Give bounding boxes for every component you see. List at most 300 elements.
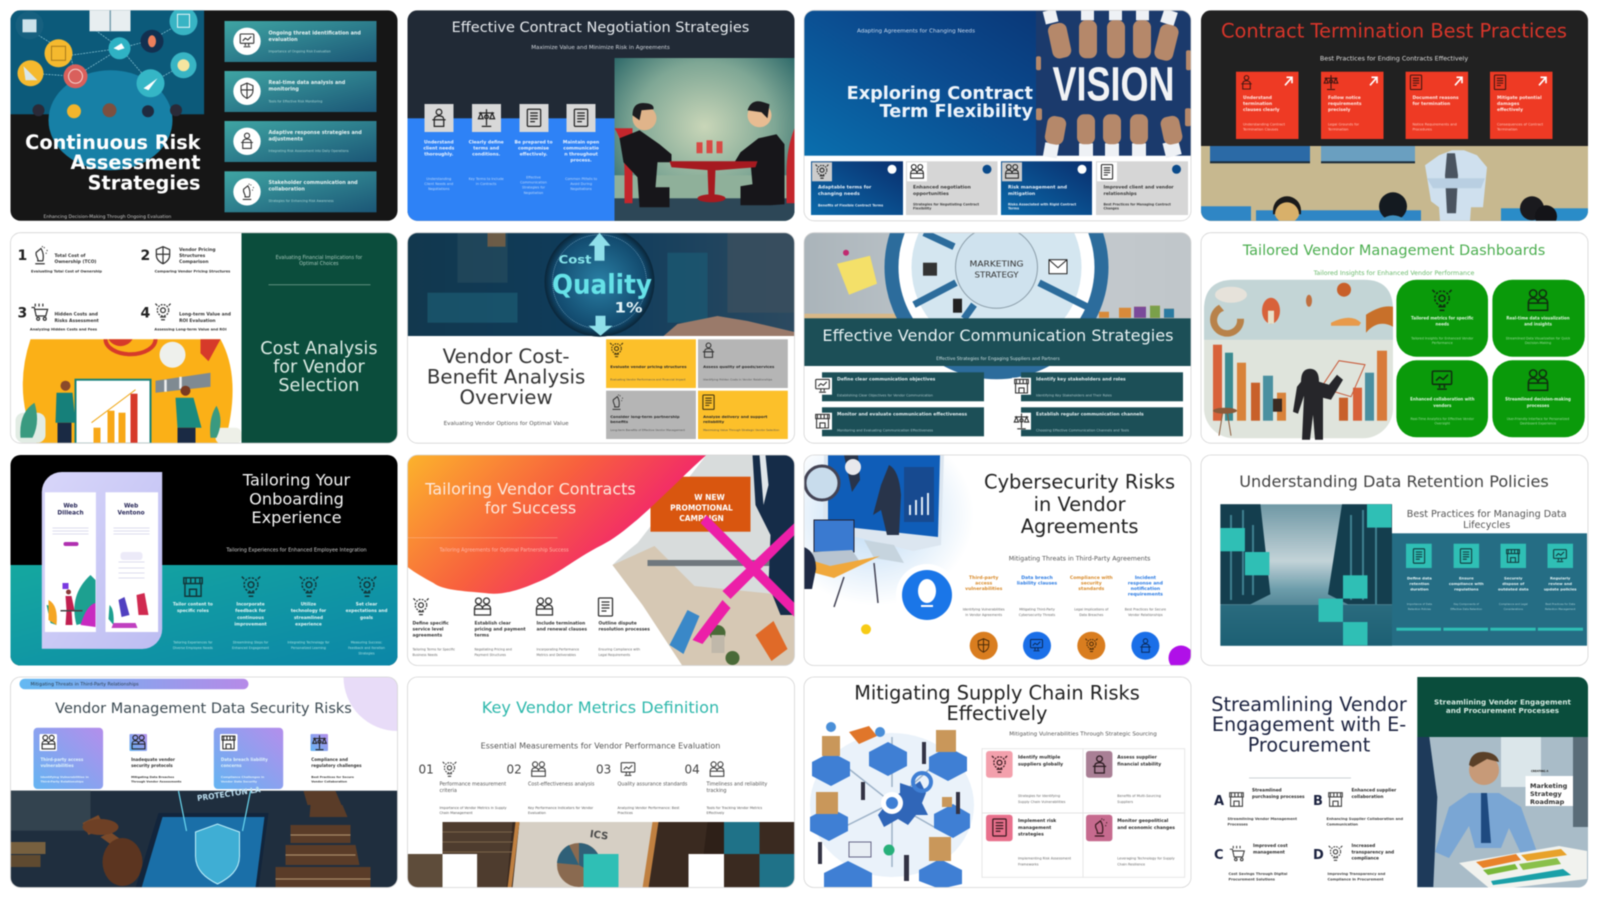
card: risk management: Risks Associated with Rigid Contract [1008, 202, 1077, 206]
item: termination and renewal [536, 598, 587, 657]
image: marketing strategy wheel [804, 155, 1191, 379]
card: stakeholders [1012, 372, 1183, 401]
panel: Mitigating Supply Chain Risks Effectively [804, 677, 1191, 889]
image: marketing strategy wheel: MARKETING [970, 259, 1024, 269]
card: monitor: Monitoring and Evaluating Communication Effectiveness [837, 429, 933, 433]
item: review policies: update policies [1544, 586, 1577, 591]
card: mitigate damages [1490, 72, 1552, 139]
card: adaptable terms: Benefits of Flexible Contract Terms [818, 203, 883, 207]
card: adaptive response: Adaptive response strategies and [268, 130, 362, 136]
metric 04 [684, 762, 767, 815]
card: objectives: Define clear communication objectives [837, 377, 936, 383]
item: data breach: Cybersecurity Threats [1019, 613, 1055, 617]
card: termination clauses: Understanding Contract [1243, 122, 1286, 126]
card: adaptive response: adjustments [268, 136, 303, 142]
card: notice requirements: precisely [1328, 107, 1350, 113]
card: pricing structures [606, 339, 696, 388]
table frame [982, 749, 1185, 877]
metric 03: Practices [618, 811, 633, 815]
item: incident response: Vendor Relationships [1128, 613, 1163, 617]
card: document reasons: Procedures [1412, 128, 1432, 132]
item: dispute resolution: Ensuring Compliance with [598, 648, 640, 652]
panel: Key Vendor Metrics Definition [408, 677, 794, 888]
item B: supplier collaboration: Enhanced supplier [1352, 788, 1397, 794]
title: Procurement [1248, 733, 1371, 756]
card: risk management: Frameworks [1018, 862, 1039, 866]
item: termination and renewal: Include termination [536, 620, 585, 626]
item: service level: service level [412, 626, 444, 632]
item: review policies [1538, 544, 1583, 631]
item: termination and renewal: Incorporating Performance [536, 648, 579, 652]
item D: transparency [1313, 843, 1394, 881]
item: third-party vulnerabilities: access [975, 582, 993, 586]
card: quality: Assess quality of goods/services [703, 364, 775, 369]
item D: transparency: D [1313, 848, 1324, 863]
item: compliance: security [1081, 580, 1102, 586]
title: Vendor Management Data Security Risks [55, 701, 352, 717]
item: utilize technology: Integrating Technology for [288, 640, 330, 644]
card: geopolitical changes: Chain Resilience [1117, 862, 1145, 866]
item C: cost management: Improved cost [1253, 843, 1288, 849]
item: open communication: process. [570, 157, 592, 163]
card: risk management: strategies [1018, 832, 1044, 838]
metric 02 [506, 762, 595, 815]
panel: Understanding Data Retention Policies [1201, 455, 1588, 666]
card: stakeholder communication: collaboration [268, 186, 305, 192]
card: mitigate damages: Mitigate potential [1497, 95, 1542, 101]
item 2: vendor pricing: Structures [179, 253, 206, 259]
item: set expectations: Measuring Success: [351, 640, 382, 644]
title: Key Vendor Metrics Definition [482, 698, 719, 717]
image: report with pie chart and colored squares: ICS [589, 829, 609, 843]
illustration: analyst and monitor [774, 425, 974, 607]
card: stakeholder communication: Strategies for Enhancing Risk Awareness [268, 199, 334, 203]
item: third-party vulnerabilities: in Vendor Agreements [965, 613, 1002, 617]
item: compromise: Communication [520, 180, 547, 184]
item: incorporate feedback: improvement [234, 622, 267, 628]
card: inadequate protocols: security protocols [131, 763, 173, 768]
item: set expectations: expectations and [346, 608, 387, 614]
item: utilize technology: streamlined [294, 615, 323, 621]
item C: cost management: management [1253, 849, 1285, 855]
panel: Streamlining Vendor Engagement with E-Procurement [1201, 677, 1588, 888]
card: adaptable terms: changing needs [818, 191, 860, 197]
image: marketing strategy wheel: STRATEGY [974, 270, 1019, 280]
item: compliance [1443, 544, 1488, 631]
item: open communication: Maintain open [563, 139, 599, 145]
card: channels [1012, 407, 1183, 436]
item: pricing and payment [474, 598, 526, 657]
card: multiple suppliers [986, 751, 1066, 804]
item: dispute resolution: Legal Requirements [598, 653, 631, 657]
metric 03 [596, 762, 688, 815]
card: compliance challenges: Best Practices for Secure [311, 775, 354, 779]
card: long-term partnership [606, 391, 696, 439]
title: Experience [251, 508, 342, 527]
item 1: total cost of ownership: Total Cost of [54, 253, 86, 259]
item: set expectations: Strategies [358, 651, 375, 655]
card: enhanced collaboration: Oversight [1435, 422, 1451, 426]
panel: Tailoring Your Onboarding Experience [10, 455, 398, 666]
card: document reasons: for termination [1412, 101, 1450, 107]
item: incorporate feedback: continuous [237, 615, 264, 621]
section heading: Lifecycles [1463, 520, 1510, 531]
card: enhanced collaboration [1396, 360, 1488, 437]
item: retention duration: Define data [1407, 576, 1432, 580]
image: presenter with promotional campaign screen [612, 455, 794, 666]
card: enhanced collaboration: Real-Time Analytics for Effective Vendor [1411, 417, 1475, 421]
item 4: long-term value: 4 [140, 306, 150, 322]
item: compliance: Data Breaches [1079, 613, 1104, 617]
image: VISION with hands: VISION [1052, 58, 1174, 111]
illustration: analysts at chart with telescope [10, 339, 242, 444]
item: compromise: compromise [518, 145, 549, 151]
card: document reasons: Document reasons [1412, 95, 1459, 101]
image: man reviewing marketing roadmap: Marketing [1530, 782, 1568, 790]
item 1: total cost of ownership [18, 247, 102, 274]
title: Assessment [70, 151, 200, 174]
item: compromise: Negotiation [524, 191, 543, 195]
item: understand client needs: client needs [423, 145, 455, 151]
card: document reasons [1406, 72, 1468, 139]
card: geopolitical changes: and economic changes [1117, 825, 1175, 831]
card: real-time visualization: Streamlined Data Visualization for Quick [1506, 337, 1570, 341]
item 1: total cost of ownership: 1 [18, 248, 27, 264]
card: tailored metrics: Tailored Insights for Enhanced Vendor [1410, 337, 1474, 341]
card: risk management [1001, 161, 1092, 215]
title: Effective Vendor Communication Strategies [822, 326, 1174, 345]
item: understand client needs: thoroughly. [424, 151, 454, 157]
item: incorporate feedback: Enhanced Engagement [232, 646, 270, 650]
item: pricing and payment: pricing and payment [474, 626, 526, 632]
metric 01: criteria [440, 788, 457, 794]
item: secure disposal: Considerations [1504, 607, 1524, 611]
card: inadequate protocols: Through Vendor Assessments [131, 779, 182, 783]
card: termination clauses: clauses clearly [1243, 107, 1280, 113]
card: notice requirements: Follow notice [1328, 95, 1361, 101]
card: delivery reliability [698, 391, 788, 439]
item: secure disposal: Compliance and Legal [1499, 602, 1528, 606]
item: review policies: review and [1548, 581, 1572, 586]
item: define terms [469, 104, 504, 186]
item 3: hidden costs: Hidden Costs and [54, 312, 98, 318]
item B: supplier collaboration: Communication [1326, 822, 1358, 826]
card: delivery reliability: reliability [703, 419, 725, 424]
title: Streamlining Vendor [1211, 693, 1407, 716]
item: open communication: Avoid During [570, 182, 592, 186]
card: monitor [813, 407, 984, 436]
card: notice requirements: Termination [1327, 128, 1349, 132]
item: review policies: Regularly [1550, 576, 1571, 580]
card: stakeholder communication: Stakeholder communication and [268, 180, 358, 186]
card: channels: Establish regular communication channels [1036, 412, 1144, 418]
item 1: total cost of ownership: Evaluating Total Cost of Ownership [31, 270, 102, 274]
card: adaptive response [224, 121, 376, 162]
subtitle: Optimal Choices [299, 261, 339, 267]
image: negotiating businessmen at chess table [614, 58, 794, 221]
item: third-party vulnerabilities: Third-party [969, 575, 998, 581]
item: retention duration: retention [1409, 581, 1430, 586]
title: Understanding Data Retention Policies [1239, 472, 1549, 491]
card: third-party access: Third-party access [40, 757, 84, 762]
metric 02: Key Performance Indicators for Vendor [528, 806, 594, 810]
item: utilize technology [288, 577, 330, 650]
card: channels: Choosing Effective Communication Channels and Tools [1036, 429, 1129, 433]
item 4: long-term value: Long-term Value and [179, 312, 231, 318]
card: negotiation opportunities: Enhanced negotiation [913, 184, 971, 190]
card: risk management: Risk management and [1008, 184, 1067, 190]
card: real-time visualization: Decision-Making [1525, 341, 1551, 345]
item: termination and renewal: and renewal clauses [536, 626, 587, 632]
image: man reviewing marketing roadmap: Roadmap [1530, 798, 1565, 806]
item B: supplier collaboration: collaboration [1352, 794, 1383, 800]
card: real-time data: Tools for Effective Risk Monitoring [268, 99, 322, 103]
image: man reviewing marketing roadmap: Strategy [1530, 790, 1563, 798]
card: threat identification: evaluation [268, 37, 298, 43]
image: presenter with promotional campaign screen: CAMPAIGN [679, 514, 724, 523]
card: streamlined decisions: processes [1527, 403, 1550, 408]
image: man reviewing marketing roadmap [1417, 737, 1588, 888]
title: Exploring Contract [847, 84, 1034, 104]
item: secure disposal: outdated data [1498, 586, 1529, 591]
subtitle: Evaluating Financial Implications for [276, 255, 362, 261]
card: adaptive response: Integrating Risk Assessment into Daily Operations [268, 149, 349, 153]
item: incorporate feedback: Streamlining Steps for [233, 640, 269, 644]
card: delivery reliability: Maximizing Value Through Strategic Vendor Selection [703, 428, 779, 432]
item D: transparency: transparency and [1352, 849, 1394, 855]
title: Tailoring Vendor Contracts [424, 480, 636, 498]
item: define terms: terms and [473, 145, 499, 151]
card: compliance challenges: Compliance and [311, 757, 348, 762]
panel: Continuous Risk Assessment Strategies [10, 7, 398, 221]
panel: Effective Contract Negotiation Strategies [408, 10, 794, 221]
item: review policies: Retention Management [1545, 607, 1575, 611]
title: Tailored Vendor Management Dashboards [1242, 243, 1545, 259]
item: utilize technology: Utilize [301, 602, 316, 608]
item: tailor content: Tailoring Experiences for [172, 640, 213, 644]
card: multiple suppliers: Supply Chain Vulnerabilities [1018, 800, 1066, 804]
panel: Exploring Contract Term Flexibility [804, 8, 1191, 221]
item: compliance: regulations [1454, 586, 1479, 591]
item: compliance: Ensure [1459, 576, 1474, 580]
item: compliance: Effective Data Retention [1450, 607, 1482, 611]
card: document reasons: Notice Requirements and [1412, 122, 1457, 126]
card: mitigate damages: damages [1497, 101, 1520, 107]
image: VISION with hands [1036, 8, 1191, 158]
item B: supplier collaboration: B [1313, 794, 1323, 809]
item: compliance: compliance with [1449, 581, 1484, 586]
panel: Tailored Vendor Management Dashboards [1201, 233, 1588, 444]
metric 02: Evaluation [528, 811, 546, 815]
panel: Effective Vendor Communication Strategies [804, 155, 1191, 444]
image: onboarding phone mockups: Dilleach [57, 510, 84, 516]
card: compliance challenges: regulatory challenges [311, 763, 362, 768]
item 1: total cost of ownership: Ownership (TCO) [54, 259, 96, 265]
item: incident response [1125, 575, 1166, 660]
card: notice requirements: requirements [1328, 101, 1362, 107]
card: real-time visualization: Real-time data visualization [1506, 316, 1570, 321]
header block [1417, 677, 1588, 737]
decorative lavender circle [344, 623, 452, 731]
card: third-party access: Identifying Vulnerabilities in [40, 775, 89, 779]
subtitle: Tailoring Agreements for Optimal Partnership Success [439, 548, 569, 554]
card: geopolitical changes [1086, 815, 1175, 866]
card: data breach liability: Data breach liability [221, 757, 268, 762]
item: open communication: Negotiations [570, 187, 592, 191]
item: compromise: Effective [526, 175, 541, 179]
card: notice requirements [1321, 72, 1384, 139]
item: dispute resolution: Outline dispute [598, 620, 637, 626]
panel: Contract Termination Best Practices [1201, 10, 1588, 227]
card: pricing structures: Evaluate vendor pricing structures [610, 364, 687, 369]
card: long-term partnership: benefits [610, 419, 629, 424]
title: Agreements [1021, 515, 1138, 538]
item: set expectations: goals [360, 615, 373, 621]
title: Cost Analysis [260, 339, 378, 359]
card: objectives: Establishing Clear Objectives for Vendor Communication [837, 394, 933, 398]
item: data breach: liability clauses [1017, 580, 1057, 586]
panel: Vendor Cost-Benefit Analysis Overview [408, 227, 794, 444]
item C: cost management: Cost Savings Through Digital [1228, 872, 1287, 876]
card: mitigate damages: Consequences of Contract [1497, 122, 1544, 126]
panel: Cost Analysis for Vendor Selection [10, 233, 398, 444]
item: compliance: Legal Implications of [1074, 608, 1109, 612]
item B: supplier collaboration: Enhancing Supplier Collaboration and [1326, 817, 1403, 821]
title: for Success [485, 498, 576, 518]
decorative dot [861, 624, 871, 634]
item A: streamlined purchasing: A [1214, 794, 1224, 809]
item: utilize technology: technology for [291, 608, 327, 614]
title: Mitigating Supply Chain Risks [854, 682, 1140, 704]
subtitle: Adapting Agreements for Changing Needs [857, 29, 975, 35]
card: stakeholders: Identify key stakeholders and roles [1036, 377, 1126, 383]
item 4: long-term value: Assessing Long-term Value and ROI [154, 328, 227, 332]
card: streamlined decisions: User-Friendly Interface for Personalized [1507, 417, 1569, 421]
card: threat identification: Ongoing threat identification and [268, 30, 361, 36]
card: termination clauses [1236, 72, 1298, 139]
card: real-time data [224, 71, 376, 112]
item: compromise [514, 104, 553, 195]
item: understand client needs: Understand [424, 139, 454, 145]
card: inadequate protocols: Inadequate vendor [131, 757, 175, 762]
card: tailored metrics [1396, 280, 1488, 357]
item: compliance: standards [1078, 586, 1105, 592]
metric 01 [418, 762, 506, 815]
image: onboarding phone mockups: Web [63, 504, 78, 510]
title: Selection [278, 376, 359, 396]
image: man reviewing marketing roadmap: CREATING A [1531, 769, 1548, 773]
item: incident response: requirements [1128, 592, 1163, 598]
item: tailor content: Diverse Employee Needs [173, 646, 213, 650]
subtitle: Mitigating Threats in Third-Party Agreements [1009, 556, 1150, 562]
item 3: hidden costs: Risks Assessment [54, 318, 99, 324]
image: onboarding phone mockups [42, 472, 162, 649]
item 3: hidden costs [18, 304, 99, 332]
item: pricing and payment: Establish clear [474, 620, 512, 626]
item 2: vendor pricing: Vendor Pricing [179, 247, 215, 253]
item 2: vendor pricing: Comparing Vendor Pricing Structures [155, 270, 230, 274]
card: threat identification [224, 21, 376, 62]
item: define terms: in Contracts [476, 182, 497, 186]
item: data breach: Data breach [1021, 575, 1053, 581]
item: open communication: n throughout [564, 151, 599, 157]
card: compliance challenges: Vendor Collaboration [311, 779, 347, 783]
item: understand client needs [423, 104, 455, 191]
item: compliance: Key Components of [1454, 602, 1479, 606]
metric 03: 03 [596, 762, 611, 776]
image: flooded city with teal squares [1220, 504, 1392, 646]
card: mitigate damages: effectively [1497, 107, 1523, 113]
subtitle: Enhancing Decision-Making Through Ongoing Evaluation [44, 214, 171, 220]
card: risk management: mitigation [1008, 191, 1035, 197]
item: retention duration: Importance of Data [1407, 602, 1432, 606]
card: inadequate protocols: Mitigating Data Breaches [131, 775, 174, 779]
card: vendor relationships: relationships [1104, 191, 1137, 197]
card: risk management: Implementing Risk Assessment [1018, 856, 1072, 860]
item: incident response: response and [1128, 580, 1163, 586]
card: vendor relationships: Changes [1104, 206, 1119, 210]
image: gavel, law books and protected laptop: PROTECTON LA [197, 785, 262, 803]
item A: streamlined purchasing [1214, 788, 1305, 826]
item: define terms: Clearly define [469, 139, 504, 145]
gradient blob [408, 455, 706, 594]
item: third-party vulnerabilities: vulnerabilities [965, 586, 1003, 592]
item: data breach: Mitigating Third-Party [1019, 608, 1055, 612]
image: man viewing charts and balloons [1204, 280, 1393, 440]
card: risk management [986, 815, 1072, 866]
card: tailored metrics: needs [1436, 322, 1450, 327]
card: monitor: Monitor and evaluate communication effectiveness [837, 412, 967, 418]
item: incorporate feedback [232, 577, 270, 650]
item: open communication: Common Pitfalls to [565, 177, 597, 181]
card: data breach liability: Compliance Challenges in [221, 775, 264, 779]
image: presenter with promotional campaign screen: PROMOTIONAL [670, 504, 733, 512]
item A: streamlined purchasing: purchasing processes [1252, 794, 1305, 800]
item: set expectations: Set clear [356, 602, 378, 608]
metric 04: Effectively [706, 811, 724, 815]
item D: transparency: Compliance in Procurement [1328, 877, 1384, 881]
card: negotiation opportunities: Flexibility [913, 206, 932, 210]
subtitle: Tailoring Experiences for Enhanced Employee Integration [225, 548, 367, 554]
card: pricing structures: Evaluating Vendor Performance and Financial Impact [610, 378, 686, 382]
item: compromise: Strategies for [522, 186, 546, 190]
item: service level: Tailoring Terms for Specific [412, 648, 455, 652]
card: tailored metrics: Performance [1432, 341, 1453, 345]
large blue circle icon [896, 564, 958, 626]
card: risk management: Terms [1008, 206, 1019, 210]
item D: transparency: Improving Transparency and [1328, 872, 1386, 876]
title: Overview [460, 386, 553, 409]
panel: Tailoring Vendor Contracts for Success [408, 455, 794, 666]
card: financial stability [1086, 751, 1161, 804]
card: long-term partnership: Consider long-term partnership [610, 414, 680, 419]
card: termination clauses: termination [1243, 101, 1272, 107]
item: secure disposal: dispose of [1502, 581, 1525, 586]
card: real-time visualization [1492, 280, 1585, 357]
card: enhanced collaboration: vendors [1433, 403, 1452, 408]
card: data breach liability [214, 728, 283, 789]
subtitle: Best Practices for Ending Contracts Effectively [1320, 55, 1468, 63]
metric 04: Timeliness and reliability [706, 782, 767, 788]
item: set expectations [346, 577, 387, 655]
item: incident response: Incident [1135, 575, 1157, 581]
subtitle: Tailored Insights for Enhanced Vendor Performance [1313, 270, 1475, 277]
item: define terms: Key Terms to Include [469, 177, 504, 181]
image: classroom presenter [1201, 146, 1588, 227]
item: third-party vulnerabilities [963, 575, 1005, 660]
card: adaptable terms: Adaptable terms for [818, 184, 872, 190]
item C: cost management [1214, 843, 1288, 881]
